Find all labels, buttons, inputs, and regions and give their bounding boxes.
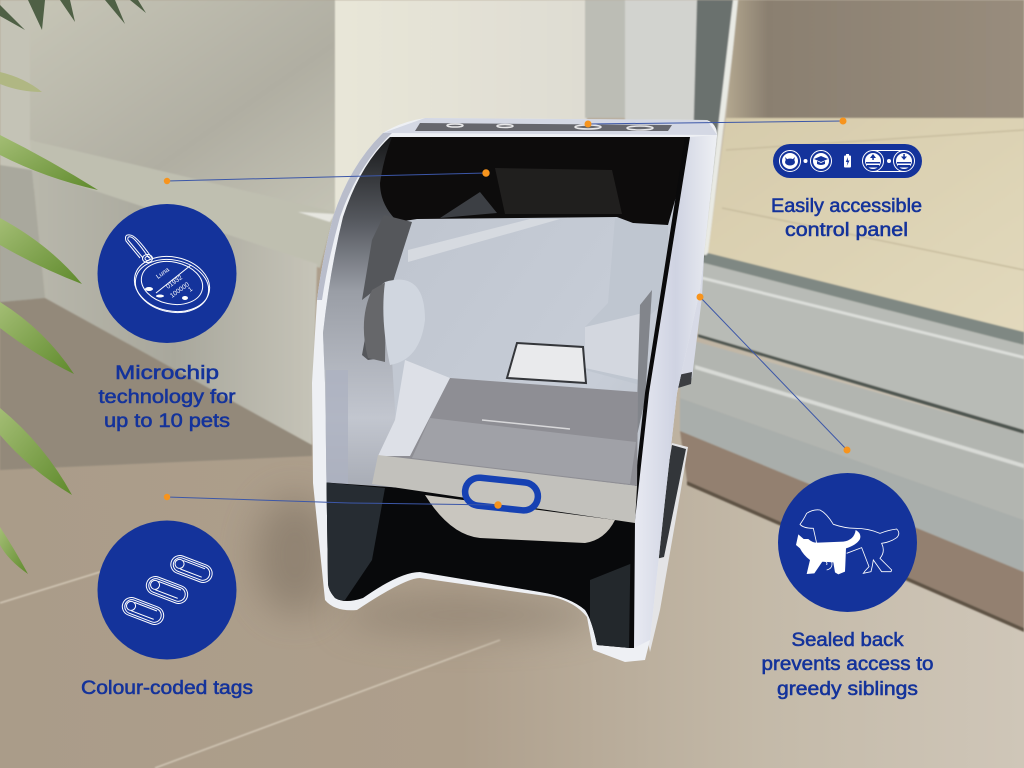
heading: sealed back: greedy siblings	[777, 679, 918, 700]
left arm	[362, 215, 412, 360]
callout line: control panel	[584, 118, 846, 128]
heading: microchip technology: Microchip	[115, 363, 219, 384]
metal scoop	[507, 343, 586, 383]
heading: control panel: Easily accessible	[771, 196, 922, 217]
black front edge	[629, 137, 690, 648]
base plinth	[640, 443, 688, 652]
rotating flap	[383, 280, 425, 365]
heading: colour-coded tags: Colour-coded tags	[81, 678, 253, 699]
icon: microchip pet tag	[98, 204, 236, 343]
heading: microchip technology: up to 10 pets	[104, 411, 230, 432]
callout line: colour tags	[164, 494, 502, 509]
dark top canopy	[380, 137, 685, 225]
icon: microchip pet tag: 100000	[169, 281, 191, 300]
callout line: sealed back	[696, 294, 850, 454]
tray inner	[378, 378, 638, 486]
heading: microchip technology: technology for	[98, 387, 236, 408]
icon: colour-coded tags	[98, 520, 236, 660]
heading: sealed back	[762, 630, 934, 700]
front right post	[634, 135, 717, 648]
callout line: microchip	[164, 169, 490, 184]
heading: sealed back: prevents access to	[762, 654, 934, 675]
icon: control panel pill	[773, 144, 922, 178]
heading: control panel	[771, 196, 922, 241]
rear side cap	[678, 215, 706, 387]
icon: dog and cat	[778, 473, 917, 612]
front glass contents, clipped to the opening	[320, 130, 700, 660]
product: pet feeder	[312, 118, 717, 662]
device shell	[312, 118, 717, 662]
interior corner and ledge	[585, 218, 668, 385]
heading: sealed back: Sealed back	[792, 630, 904, 651]
tray front	[372, 455, 637, 523]
icon: microchip pet tag: 01932	[165, 274, 184, 291]
icon: microchip pet tag: Luna	[155, 266, 171, 281]
top surface and control strip	[383, 118, 717, 135]
blue handle tag	[464, 476, 539, 512]
heading: microchip technology	[98, 363, 236, 432]
right clear flap	[637, 290, 652, 433]
icon: microchip pet tag: 1	[187, 286, 194, 294]
heading: control panel: control panel	[785, 220, 908, 241]
left transparent pane	[323, 137, 394, 488]
lower dark area	[326, 482, 631, 648]
plant leaves	[0, 0, 146, 574]
food bowl	[425, 495, 615, 543]
